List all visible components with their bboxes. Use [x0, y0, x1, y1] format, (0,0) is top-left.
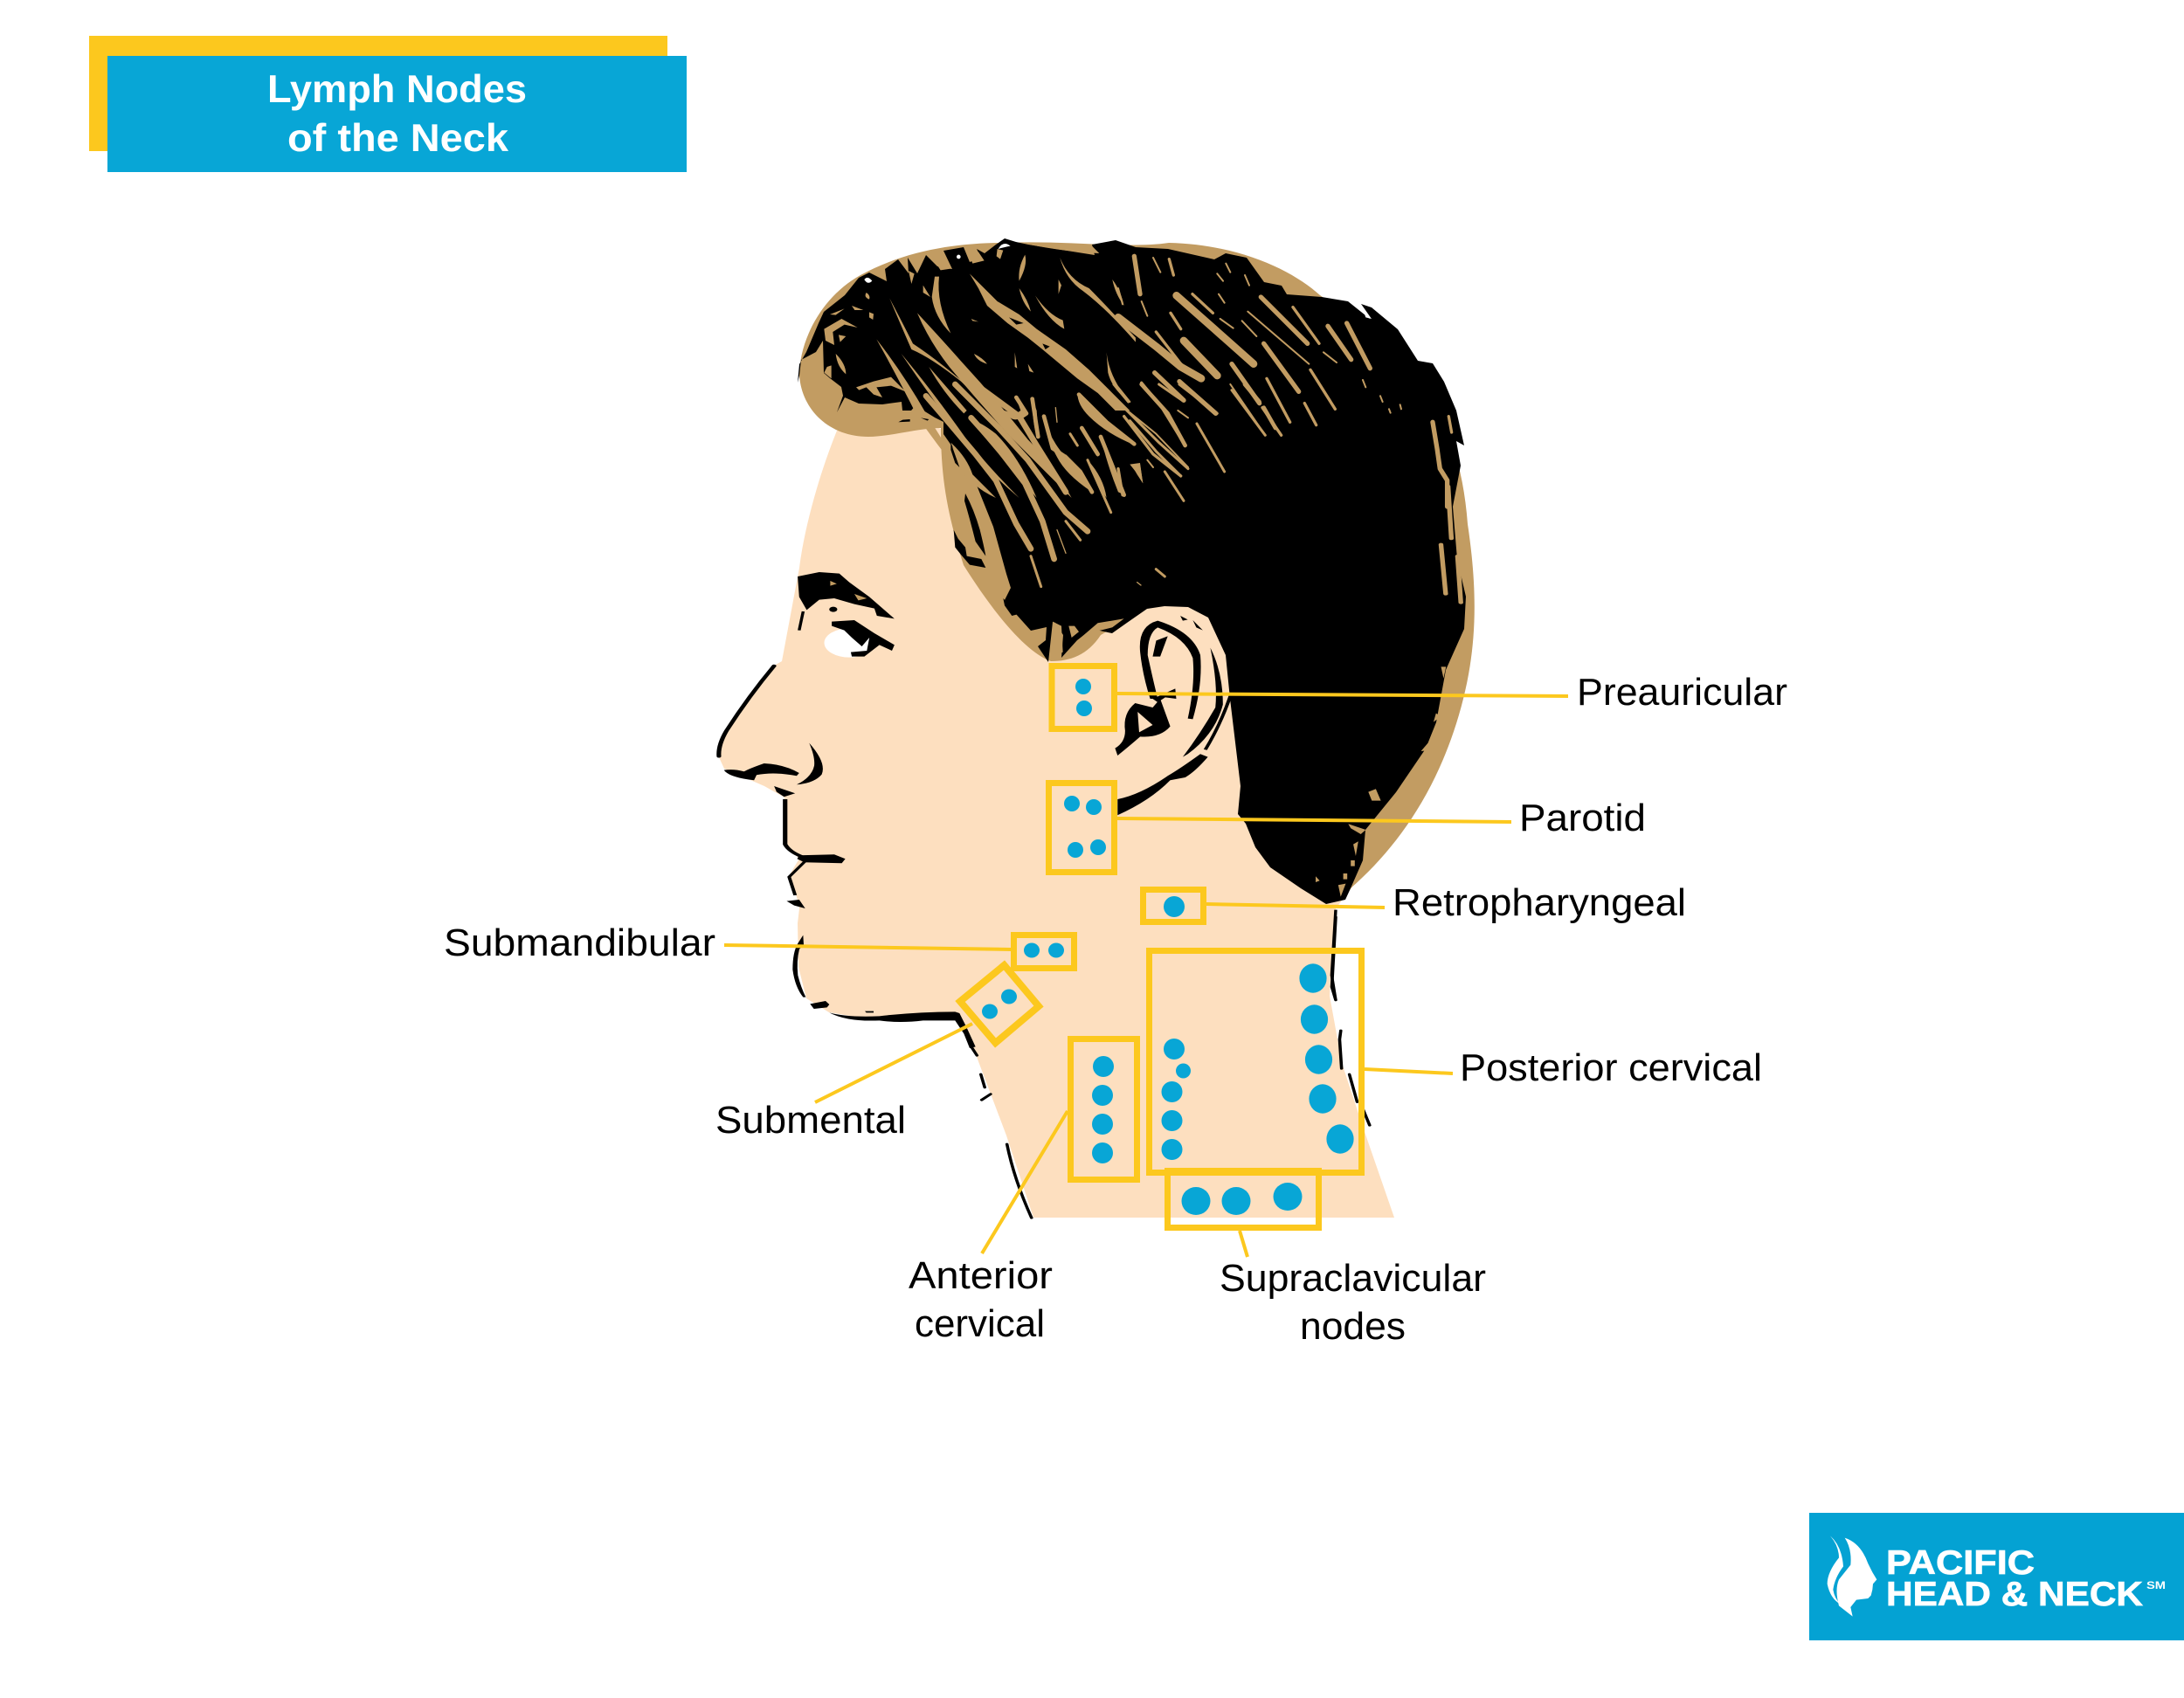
hair lock fills, front: [814, 244, 1136, 498]
ear: [1140, 621, 1201, 719]
label: Preauricular: [1577, 671, 1787, 714]
title: Lymph Nodes: [267, 68, 527, 111]
logo text: HEAD & NECK: [1886, 1576, 2143, 1613]
hair strands, lower: [926, 384, 1275, 655]
hair strands, right side and nape: [1441, 487, 1461, 603]
leader line: [1206, 904, 1385, 908]
group: Posterior cervical: [1150, 950, 1762, 1172]
nodes: [1162, 963, 1354, 1160]
chin and jaw: [792, 935, 976, 1048]
nose: [719, 666, 774, 756]
group: Submandibular: [444, 921, 1075, 968]
box: [1013, 935, 1075, 968]
label: Anterior: [909, 1254, 1053, 1297]
neck lines: [971, 917, 1370, 1218]
box: [1150, 950, 1361, 1172]
leader line: [1365, 1069, 1453, 1073]
nodes: [1024, 943, 1064, 957]
nodes: [1181, 1183, 1302, 1215]
head illustration: [719, 238, 1475, 1218]
hair strands, back of crown: [1118, 256, 1452, 507]
skin: [719, 428, 1394, 1218]
eye white: [825, 628, 874, 658]
group: Supraclavicular nodes: [1167, 1170, 1486, 1348]
box: [1052, 666, 1115, 728]
leader line: [982, 1111, 1068, 1253]
eye: [832, 620, 895, 657]
label: Submental: [715, 1099, 906, 1142]
label: cervical: [915, 1302, 1045, 1345]
hair base: [799, 242, 1475, 888]
leader line: [1117, 818, 1511, 822]
hairline dark locks: [950, 443, 1018, 616]
box: [1071, 1039, 1137, 1179]
leader line: [724, 945, 1011, 949]
box: [1143, 889, 1204, 922]
hair black: [798, 238, 1466, 904]
nodes: [1075, 679, 1092, 716]
group: Preauricular: [1052, 666, 1787, 728]
group: Retropharyngeal: [1143, 881, 1686, 924]
leader line: [815, 1024, 972, 1102]
box: [960, 965, 1039, 1043]
group: Parotid: [1048, 783, 1646, 872]
logo: Pacific Head & Neck: [1809, 1513, 2184, 1640]
logo text: SM: [2146, 1579, 2166, 1591]
box: [1167, 1170, 1319, 1228]
group: Submental: [715, 965, 1039, 1142]
leader line: [1240, 1231, 1248, 1257]
label: Retropharyngeal: [1393, 881, 1686, 924]
icon: face silhouette: [1828, 1536, 1876, 1617]
nodes: [1092, 1056, 1114, 1163]
face features: [719, 572, 1336, 1000]
leader line: [1117, 694, 1568, 696]
title banner: [89, 36, 687, 172]
nodes: [1064, 796, 1106, 858]
label: nodes: [1300, 1305, 1406, 1348]
label: Supraclavicular: [1220, 1257, 1486, 1300]
mouth: [785, 799, 802, 857]
logo text: PACIFIC: [1886, 1544, 2035, 1582]
nodes: [982, 989, 1017, 1018]
label: Submandibular: [444, 921, 715, 964]
box: [1048, 783, 1115, 872]
jaw line: [1117, 754, 1208, 815]
label: Posterior cervical: [1460, 1046, 1762, 1089]
group: Anterior cervical: [909, 1039, 1137, 1345]
title: of the Neck: [287, 117, 508, 160]
node: [1164, 896, 1185, 917]
eyebrow: [798, 572, 895, 618]
label: Parotid: [1519, 797, 1646, 839]
